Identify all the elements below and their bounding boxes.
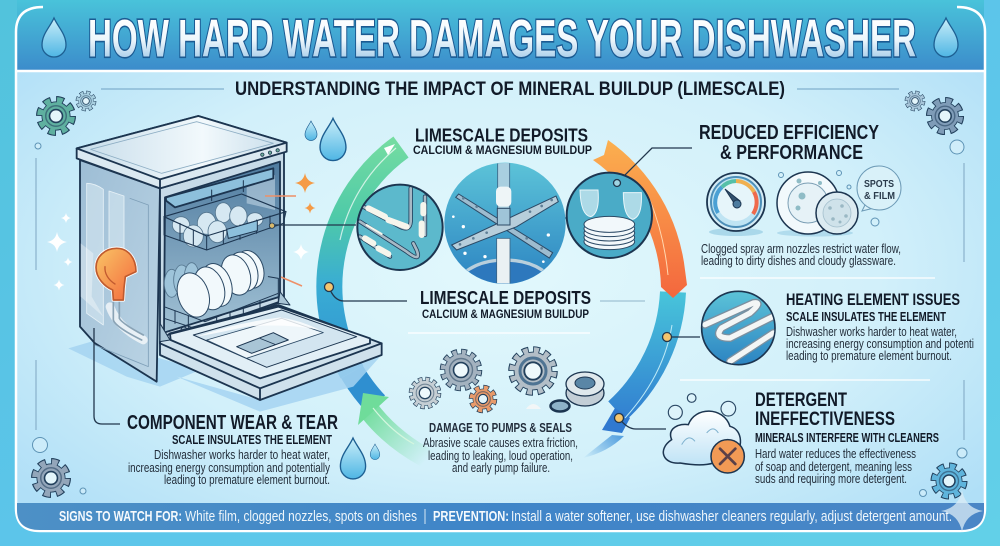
text: limescale deposits middle: CALCIUM & MAGNESIUM BUILDUP [422,307,589,321]
callout: spots and film bubble [857,166,901,211]
heating element on side [96,248,143,340]
icon: soap cloud with cross [663,394,744,473]
medallion: spray arm [444,160,566,290]
icon: water drops lower [340,438,380,479]
dishwasher illustration [68,116,382,412]
heading: reduced efficiency [699,122,880,164]
text: damage to pumps and seals: Abrasive scale causes extra friction, [423,436,578,450]
text: component wear and tear: COMPONENT WEAR & TEAR [127,412,338,434]
medallion: dishes and glasses [567,173,652,258]
medallions: limescale [357,160,652,290]
lower rack with plates [164,247,278,333]
text: heating element issues [786,290,974,363]
text: component wear and tear: increasing energy consumption and potentially [128,461,331,475]
floor shadow [68,340,380,412]
top slab [77,116,287,188]
icon: spotted plates [777,170,879,236]
text: damage to pumps and seals: and early pump failure. [452,461,550,475]
text: component wear and tear: Dishwasher works harder to heat water, [154,448,330,462]
decorative corner gears and bubbles [32,93,967,496]
icon: pumps and seals gears [412,351,604,412]
heading: reduced efficiency: REDUCED EFFICIENCY [699,122,880,144]
callout dot on dishes medallion [614,180,620,186]
callout: spots and film bubble: & FILM [864,190,895,202]
subtitle: UNDERSTANDING THE IMPACT OF MINERAL BUILDUP (LIMESCALE) [235,79,785,100]
footer bar [17,503,984,530]
text: component wear and tear: SCALE INSULATES THE ELEMENT [172,433,332,447]
heading: reduced efficiency: & PERFORMANCE [720,142,863,164]
text: damage to pumps and seals: leading to leaking, loud operation, [428,449,573,463]
text: damage to pumps and seals: DAMAGE TO PUMPS & SEALS [429,420,572,435]
text: limescale deposits middle [420,288,591,321]
text: damage to pumps and seals [423,420,578,475]
upper rack with cups [164,194,286,250]
open door [160,292,382,400]
green return arrow [358,393,436,466]
footer bar: SIGNS TO WATCH FOR: [59,508,182,525]
white sparkles [47,213,309,290]
callout lines and dots [94,148,935,429]
header band [17,0,984,70]
text: detergent ineffectiveness: Hard water reduces the effectiveness [755,447,916,461]
icon: title drop right [934,18,958,57]
text: reduced efficiency description: Clogged spray arm nozzles restrict water flow, [701,242,901,256]
text: limescale deposits middle: LIMESCALE DEPOSITS [420,288,591,308]
text: heating element issues: leading to premature element burnout. [786,349,952,363]
icon: water drops upper [305,118,346,161]
text: component wear and tear [127,412,338,487]
text: limescale deposits top [413,126,592,157]
medallion: scaled pipes [357,185,443,270]
text: reduced efficiency description [701,242,901,268]
text: reduced efficiency description: leading to dirty dishes and cloudy glassware. [701,254,896,268]
footer bar: PREVENTION: [433,508,509,525]
text: detergent ineffectiveness: MINERALS INTERFERE WITH CLEANERS [755,431,939,445]
footer bar: White film, clogged nozzles, spots on dishes [185,508,417,525]
callout: spots and film bubble: SPOTS [864,178,894,190]
text: limescale deposits top: LIMESCALE DEPOSITS [415,126,588,146]
text: detergent ineffectiveness: of soap and detergent, meaning less [755,460,912,474]
decorative corner star [941,490,983,532]
text: heating element issues: Dishwasher works harder to heat water, [786,325,957,339]
orange arc arrow [593,140,687,298]
medallion: heating element [702,291,775,365]
orange sparkles and pointers [265,173,316,286]
text: limescale deposits top: CALCIUM & MAGNESIUM BUILDUP [413,143,592,157]
icon: title drop left [42,18,66,57]
icon: gauge [707,173,765,236]
green to blue left arc [329,144,401,404]
text: detergent ineffectiveness: INEFFECTIVENESS [755,409,895,430]
circular cycle arrows [329,140,687,466]
door frame and interior [160,152,284,343]
text: component wear and tear: leading to premature element burnout. [164,473,330,487]
cabinet side [80,160,160,382]
text: heating element issues: SCALE INSULATES THE ELEMENT [786,310,946,324]
text: detergent ineffectiveness: DETERGENT [755,390,847,411]
text: detergent ineffectiveness [755,390,939,486]
text: detergent ineffectiveness: suds and requiring more detergent. [755,472,907,486]
blue arc arrow [583,292,673,458]
